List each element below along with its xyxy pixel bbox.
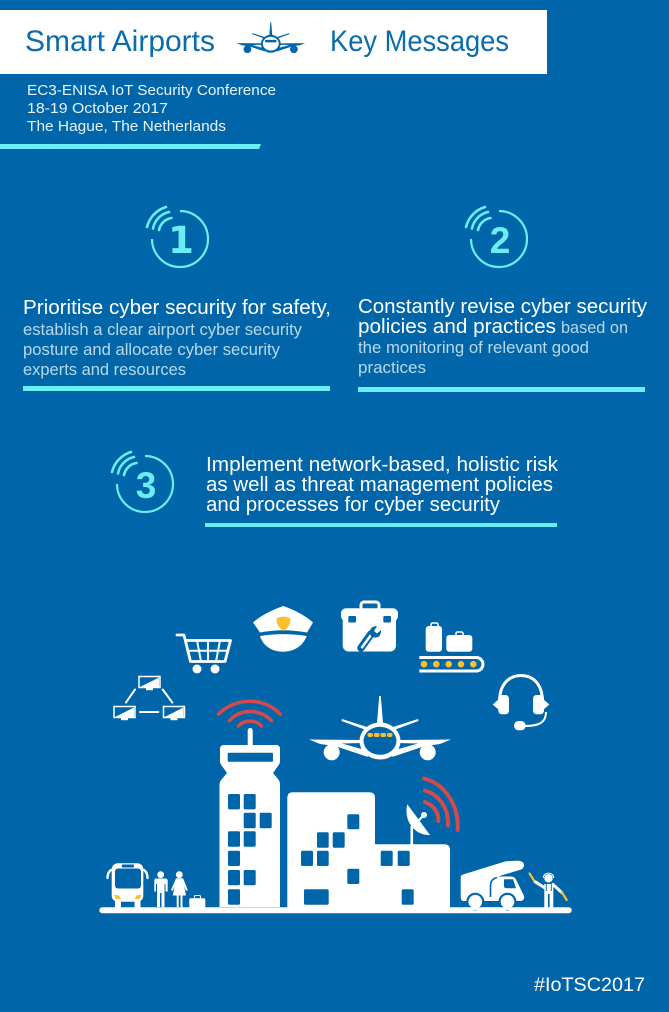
conference details bbox=[27, 83, 276, 135]
message 2 text: the monitoring of relevant good bbox=[358, 338, 589, 357]
message 1 text bbox=[23, 297, 331, 379]
header banner bbox=[0, 10, 547, 74]
terminal building bbox=[287, 792, 450, 908]
icon: pilot cap bbox=[253, 606, 313, 652]
icon: number 3 badge bbox=[112, 452, 173, 512]
message 1 text: Prioritise cyber security for safety, bbox=[23, 297, 331, 319]
title: Smart Airports: Smart Airports bbox=[25, 25, 215, 58]
icon: passenger suitcase bbox=[189, 896, 205, 908]
title: Key Messages: Key Messages bbox=[330, 25, 509, 58]
message 1 underline bbox=[23, 386, 330, 391]
message 2 text: based on bbox=[561, 318, 628, 337]
icon: ground marshal bbox=[530, 873, 567, 908]
icon: tower wifi signal bbox=[218, 701, 280, 726]
icon: dish signal waves bbox=[424, 778, 458, 830]
icon: header plane bbox=[236, 22, 305, 53]
message 2 text bbox=[358, 296, 647, 377]
icon: stairs truck bbox=[461, 861, 524, 911]
icon: toolbox bbox=[341, 602, 398, 652]
message 2 underline bbox=[358, 387, 645, 392]
icon: satellite dish bbox=[406, 804, 430, 846]
icon: baggage conveyor bbox=[419, 623, 483, 671]
icon: headset bbox=[493, 676, 549, 730]
message 3 text: Implement network-based, holistic risk bbox=[206, 454, 559, 476]
icon: male passenger bbox=[154, 871, 168, 907]
header underline bbox=[0, 144, 261, 149]
message 1 text: establish a clear airport cyber security bbox=[23, 320, 302, 339]
icon: number 3 badge: 3 bbox=[136, 465, 156, 506]
message 2 text: practices bbox=[358, 358, 426, 377]
message 3 underline bbox=[205, 523, 557, 527]
icon: female passenger bbox=[171, 871, 188, 907]
ground line bbox=[99, 907, 572, 913]
message 3 text bbox=[206, 454, 559, 516]
icon: bus bbox=[108, 863, 148, 908]
message 1 text: posture and allocate cyber security bbox=[23, 340, 280, 359]
icon: shopping cart bbox=[177, 635, 230, 674]
icon: number 1 badge: 1 bbox=[168, 219, 194, 262]
message 3 text: and processes for cyber security bbox=[206, 494, 500, 516]
message 1 text: experts and resources bbox=[23, 360, 186, 379]
icon: number 1 badge bbox=[147, 207, 208, 267]
message 3 text: as well as threat management policies bbox=[206, 474, 553, 496]
conference details: EC3-ENISA IoT Security Conference bbox=[27, 83, 276, 99]
icon: central airplane bbox=[309, 696, 451, 760]
conference details: The Hague, The Netherlands bbox=[27, 119, 226, 135]
conference details: 18-19 October 2017 bbox=[27, 101, 168, 117]
icon: computer network bbox=[114, 676, 184, 720]
icon: number 2 badge: 2 bbox=[490, 220, 510, 261]
hashtag: #IoTSC2017 bbox=[534, 974, 645, 996]
icon: number 2 badge bbox=[466, 207, 527, 267]
message 2 text: Constantly revise cyber security bbox=[358, 296, 647, 318]
control tower bbox=[220, 728, 280, 907]
message 2 text: policies and practices bbox=[358, 316, 556, 338]
